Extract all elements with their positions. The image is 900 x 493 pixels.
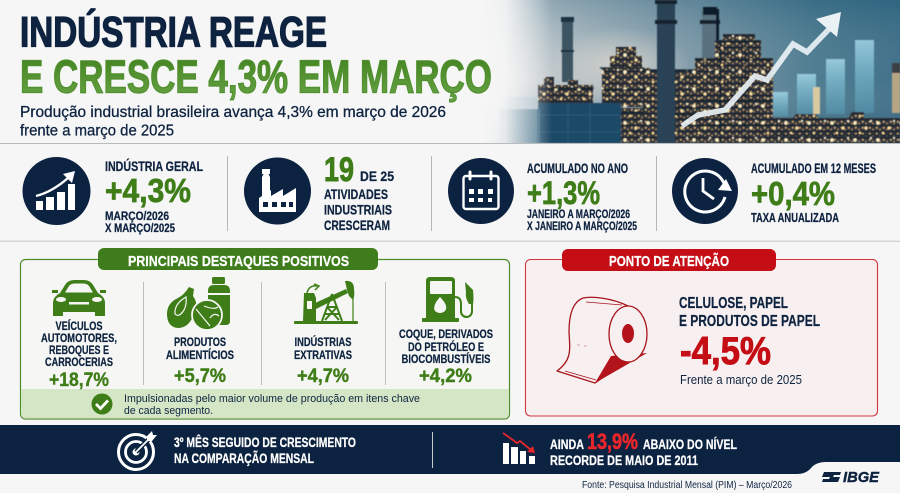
KPI: 19 de 25 atividades: 19 (324, 151, 354, 189)
heading pill: destaques (98, 248, 378, 270)
icon: car (52, 280, 106, 316)
item: coque e derivados: COQUE, DERIVADOS (399, 327, 493, 341)
icon: fuel pump (422, 277, 474, 322)
KPI: indústria geral: +4,3% (105, 172, 191, 209)
subtitle: frente a março de 2025 (20, 122, 174, 140)
KPI: 19 de 25 atividades: INDUSTRIAIS (324, 202, 392, 218)
KPI: indústria geral: INDÚSTRIA GERAL (105, 159, 203, 174)
heading pill: atenção (562, 249, 776, 271)
item: veículos: AUTOMOTORES, (41, 331, 117, 345)
icon: check (92, 394, 112, 414)
KPI: acumulado no ano: +1,3% (527, 175, 600, 211)
title: INDÚSTRIA REAGE (20, 8, 327, 56)
item: indústrias extrativas: +4,7% (297, 366, 349, 387)
KPI: 19 de 25 atividades (244, 151, 394, 233)
KPI: acumulado no ano: JANEIRO A MARÇO/2026 (527, 209, 630, 221)
item: indústrias extrativas: INDÚSTRIAS (294, 334, 352, 349)
icon: food (167, 277, 230, 330)
logo: IBGE: IBGE (843, 470, 880, 486)
arrow: growth (682, 12, 841, 126)
item: indústrias extrativas: EXTRATIVAS (294, 348, 352, 362)
footer band (0, 425, 900, 474)
panel: ponto de atenção: E PRODUTOS DE PAPEL (679, 313, 820, 330)
KPI: acumulado em 12 meses: TAXA ANUALIZADA (751, 210, 839, 225)
KPI: acumulado no ano (448, 158, 637, 233)
heading pill: destaques: PRINCIPAIS DESTAQUES POSITIVOS (128, 253, 349, 270)
item: coque e derivados: +4,2% (419, 366, 472, 387)
item: coque e derivados: BIOCOMBUSTÍVEIS (402, 351, 490, 366)
panel: ponto de atenção: -4,5% (680, 330, 771, 373)
panel: ponto de atenção: CELULOSE, PAPEL (679, 295, 788, 312)
icon: clock (672, 158, 738, 224)
KPI: 19 de 25 atividades: ATIVIDADES (324, 187, 388, 202)
item: produtos alimentícios: +5,7% (174, 366, 226, 387)
text: ainda 13,9%: AINDA (550, 437, 584, 452)
panel: ponto de atenção (526, 249, 878, 416)
KPI: acumulado em 12 meses: +0,4% (751, 175, 835, 212)
text: ainda 13,9%: RECORDE DE MAIO DE 2011 (550, 453, 698, 468)
text: 3º mês: NA COMPARAÇÃO MENSAL (174, 451, 314, 466)
item: coque e derivados: DO PETRÓLEO E (408, 339, 484, 354)
text: 3º mês (174, 435, 356, 466)
note: impulsionadas: de cada segmento. (124, 405, 213, 417)
icon: rising chart (22, 157, 90, 225)
hero image: refinery with growth arrow (480, 0, 900, 143)
KPI: acumulado em 12 meses (672, 158, 876, 225)
item: veículos (41, 280, 117, 391)
KPI: indústria geral: X MARÇO/2025 (105, 223, 175, 235)
KPI: indústria geral: MARÇO/2026 (105, 211, 169, 223)
text: ainda 13,9%: 13,9% (587, 429, 638, 454)
heading pill: atenção: PONTO DE ATENÇÃO (609, 252, 729, 270)
item: produtos alimentícios: PRODUTOS (174, 335, 226, 349)
title: E CRESCE 4,3% EM MARÇO (20, 50, 492, 102)
item: coque e derivados (399, 277, 493, 387)
text: ainda 13,9% (550, 429, 737, 468)
icon: calendar (448, 158, 514, 224)
panel: principais destaques positivos (20, 248, 510, 419)
icon: falling bars (503, 433, 535, 464)
item: veículos: CARROCERIAS (45, 355, 113, 369)
icon: paper roll (557, 297, 647, 383)
KPI: acumulado no ano: X JANEIRO A MARÇO/2025 (527, 221, 637, 233)
icon: target (118, 431, 157, 470)
title (20, 8, 492, 102)
item: veículos: VEÍCULOS (56, 318, 102, 333)
text: ainda 13,9%: ABAIXO DO NÍVEL (643, 437, 737, 452)
note: impulsionadas: Impulsionadas pelo maior volume de produção em itens chave (124, 393, 420, 405)
item: veículos: +18,7% (49, 370, 109, 391)
KPI: 19 de 25 atividades: DE 25 (360, 168, 394, 184)
subtitle: Produção industrial brasileira avança 4,3% em março de 2026 (20, 104, 446, 121)
item: indústrias extrativas (294, 281, 358, 387)
item: produtos alimentícios: ALIMENTÍCIOS (166, 347, 234, 362)
icon: oil pump jack (294, 281, 358, 324)
text: 3º mês: 3º MÊS SEGUIDO DE CRESCIMENTO (174, 435, 356, 450)
panel: ponto de atenção: Frente a março de 2025 (680, 372, 802, 387)
icon: factory (244, 158, 311, 224)
KPI: acumulado no ano: ACUMULADO NO ANO (527, 161, 628, 176)
logo: IBGE (822, 470, 880, 486)
KPI: indústria geral (22, 157, 203, 235)
KPI: 19 de 25 atividades: CRESCERAM (324, 218, 390, 233)
note: impulsionadas (92, 393, 420, 417)
subtitle (20, 104, 446, 140)
item: veículos: REBOQUES E (49, 343, 109, 357)
source note: Fonte: Pesquisa Industrial Mensal (PIM) – Março/2026 (582, 480, 792, 491)
item: produtos alimentícios (166, 277, 234, 387)
icon: translucent rising bars (773, 40, 874, 116)
